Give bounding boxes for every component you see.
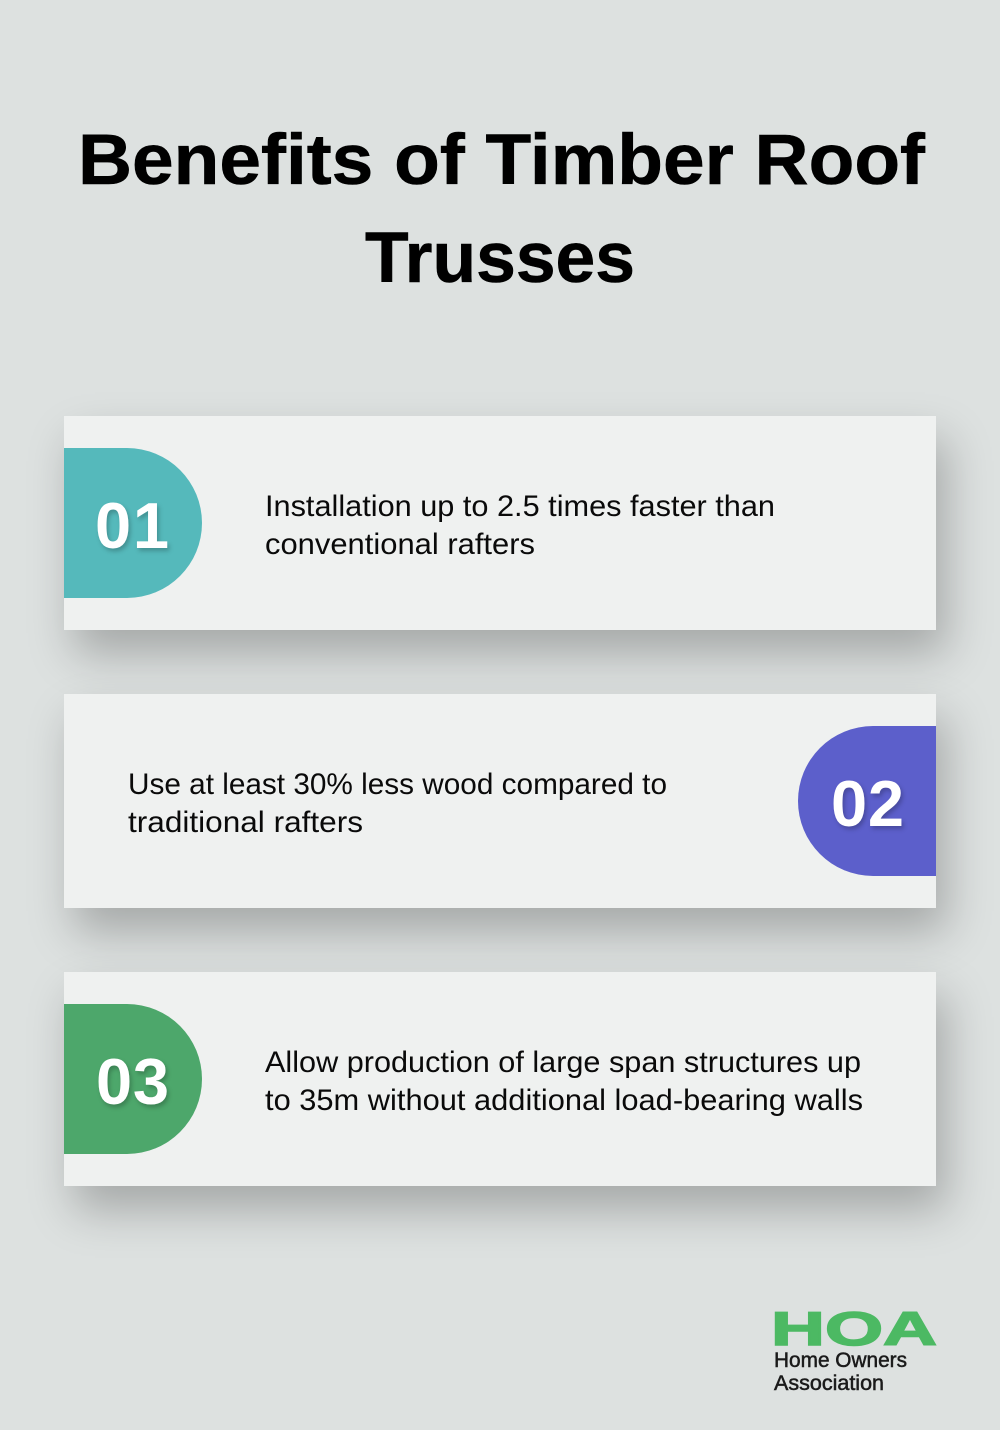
badge: 02	[798, 726, 936, 876]
title: Trusses	[365, 219, 635, 298]
badge: 02: 02	[831, 767, 904, 840]
badge: 01: 01	[95, 489, 169, 562]
badge: 03	[64, 1004, 202, 1154]
text: benefit 01: conventional rafters	[265, 528, 535, 561]
badge: 01	[64, 448, 202, 598]
logo: HOA Home Owners Association: HOA	[771, 1302, 937, 1355]
text: benefit 02: traditional rafters	[128, 806, 363, 839]
text: benefit 03: to 35m without additional load-bearing walls	[265, 1084, 863, 1117]
text: benefit 03	[265, 1046, 863, 1117]
text: benefit 01	[265, 490, 775, 561]
panel: benefit 01	[64, 416, 936, 630]
text: benefit 03: Allow production of large span structures up	[265, 1046, 861, 1079]
title	[78, 121, 926, 298]
panel: benefit 03	[64, 972, 936, 1186]
panel: benefit 02	[64, 694, 936, 908]
text: benefit 01: Installation up to 2.5 times faster than	[265, 490, 775, 523]
text: benefit 02	[128, 768, 667, 839]
badge: 03: 03	[96, 1045, 169, 1118]
text: benefit 02: Use at least 30% less wood compared to	[128, 768, 667, 801]
title: Benefits of Timber Roof	[78, 121, 925, 200]
logo: HOA Home Owners Association: Home Owners	[774, 1349, 907, 1372]
logo: HOA Home Owners Association: Association	[774, 1372, 884, 1395]
